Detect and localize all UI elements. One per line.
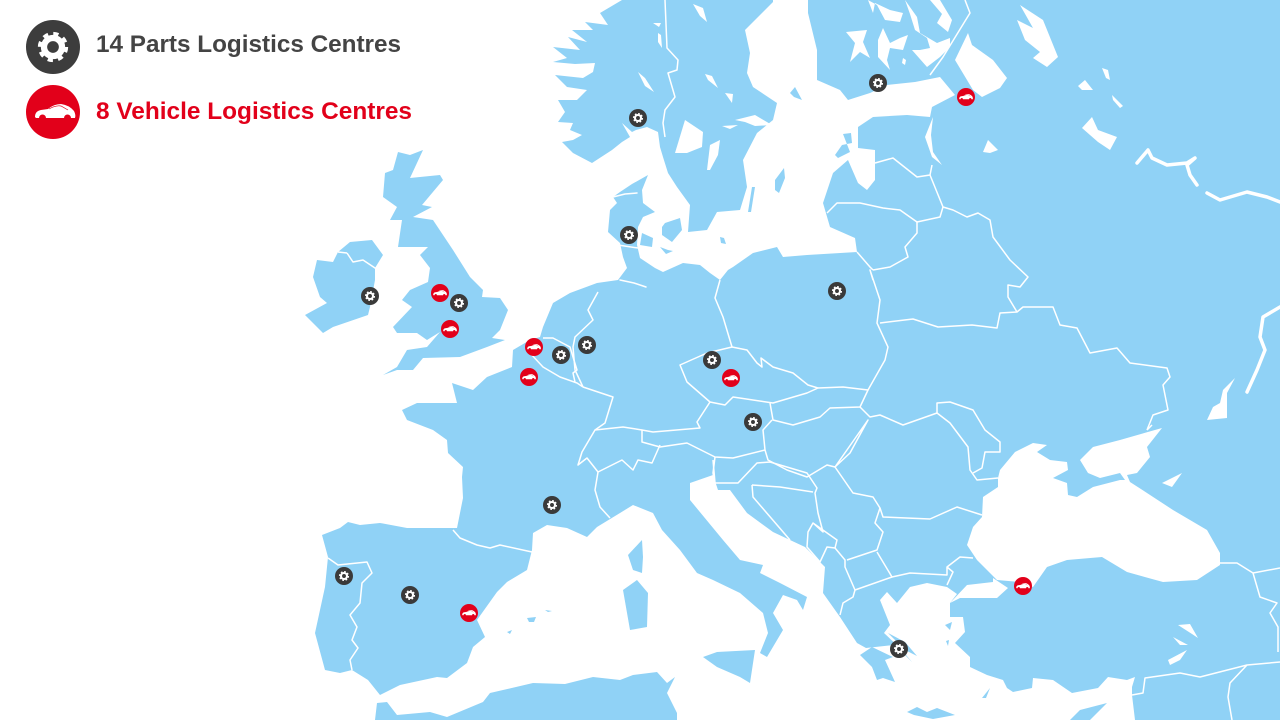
marker: parts dublin <box>361 287 379 305</box>
island: corsica <box>628 540 643 573</box>
island: bornholm <box>720 237 726 244</box>
marker: parts denmark <box>620 226 638 244</box>
lake: volgograd reservoir <box>1207 378 1235 420</box>
island: gotland <box>775 168 785 193</box>
map of europe <box>305 0 1280 720</box>
icon: parts gear <box>26 20 80 74</box>
lakes: norway <box>638 23 662 92</box>
lakes: finland east <box>905 0 952 67</box>
marker: vehicle turkey <box>1014 577 1032 595</box>
markers: vehicle logistics centres <box>431 88 1032 622</box>
marker: parts belgium <box>552 346 570 364</box>
marker: vehicle uk south <box>441 320 459 338</box>
lake: finland small <box>902 58 906 65</box>
lake: malaren <box>722 115 772 129</box>
lakes: russia small <box>1078 68 1123 108</box>
island: saaremaa <box>835 133 852 158</box>
rivers and inlets <box>613 150 1280 392</box>
country borders <box>328 0 1280 720</box>
marker: vehicle czech <box>722 369 740 387</box>
lake: vanern <box>675 120 703 153</box>
marker: parts uk <box>450 294 468 312</box>
volga upper <box>1137 150 1197 185</box>
legend item: vehicle logistics centres <box>26 85 412 139</box>
lakes: finland west <box>846 30 870 62</box>
lakes: finland centre <box>878 28 908 70</box>
volga lower <box>1247 307 1280 392</box>
markers: parts logistics centres <box>335 74 908 658</box>
island: aland <box>790 87 802 100</box>
lake: ladoga <box>955 33 1007 97</box>
island: sardinia <box>623 580 648 630</box>
legend label: parts: 14 Parts Logistics Centres <box>96 31 401 58</box>
marker: parts vienna <box>744 413 762 431</box>
island: oland <box>748 187 755 212</box>
lakes: sweden north <box>693 4 733 103</box>
lakes: finland north <box>868 0 903 22</box>
elbe inlet and limfjord <box>613 193 646 287</box>
marker: parts france <box>543 496 561 514</box>
marker: parts germany <box>578 336 596 354</box>
lake: ilmen <box>983 140 998 153</box>
landmass: mainland europe <box>315 0 1280 720</box>
lakes: kuban <box>1162 473 1182 487</box>
sea: black sea and azov <box>967 428 1220 587</box>
lakes: turkey <box>1168 624 1198 665</box>
island: mallorca <box>527 617 536 622</box>
island: euboea <box>888 633 917 656</box>
legend <box>26 20 412 139</box>
lake: rybinsk <box>1082 117 1117 150</box>
marker: vehicle st petersburg <box>957 88 975 106</box>
marker: parts helsinki <box>869 74 887 92</box>
island: menorca <box>545 610 552 612</box>
lake: peipus <box>925 117 942 165</box>
island: zealand <box>662 218 682 242</box>
marker: parts madrid <box>401 586 419 604</box>
marker: parts oslo <box>629 109 647 127</box>
lake: onega <box>1017 5 1058 67</box>
island: peloponnese <box>860 647 895 682</box>
island: lolland <box>660 247 673 254</box>
island: crete <box>907 707 955 719</box>
island: lesbos <box>945 622 952 630</box>
marker: vehicle valencia <box>460 604 478 622</box>
islands <box>507 87 1107 720</box>
sea: marmara <box>950 578 1008 603</box>
island: chios <box>946 640 949 646</box>
legend label: vehicle: 8 Vehicle Logistics Centres <box>96 98 412 125</box>
island: rhodes <box>982 688 990 698</box>
volga east <box>1207 192 1280 202</box>
marker: parts warsaw <box>828 282 846 300</box>
landmass: north africa <box>375 672 677 720</box>
marker: vehicle zeebrugge <box>525 338 543 356</box>
marker: parts czech <box>703 351 721 369</box>
legend item: parts logistics centres <box>26 20 401 74</box>
island: funen <box>640 233 653 247</box>
island: sicily <box>703 650 755 683</box>
marker: parts athens <box>890 640 908 658</box>
island: cyprus <box>1070 703 1107 720</box>
landmass: ireland <box>305 240 383 333</box>
landmass: great britain <box>383 150 508 375</box>
lake: vattern <box>707 140 720 170</box>
island: ibiza <box>507 630 512 634</box>
marker: vehicle france north <box>520 368 538 386</box>
seas and lakes <box>638 0 1235 665</box>
marker: vehicle uk north <box>431 284 449 302</box>
icon: vehicle car <box>26 85 80 139</box>
marker: parts portugal <box>335 567 353 585</box>
